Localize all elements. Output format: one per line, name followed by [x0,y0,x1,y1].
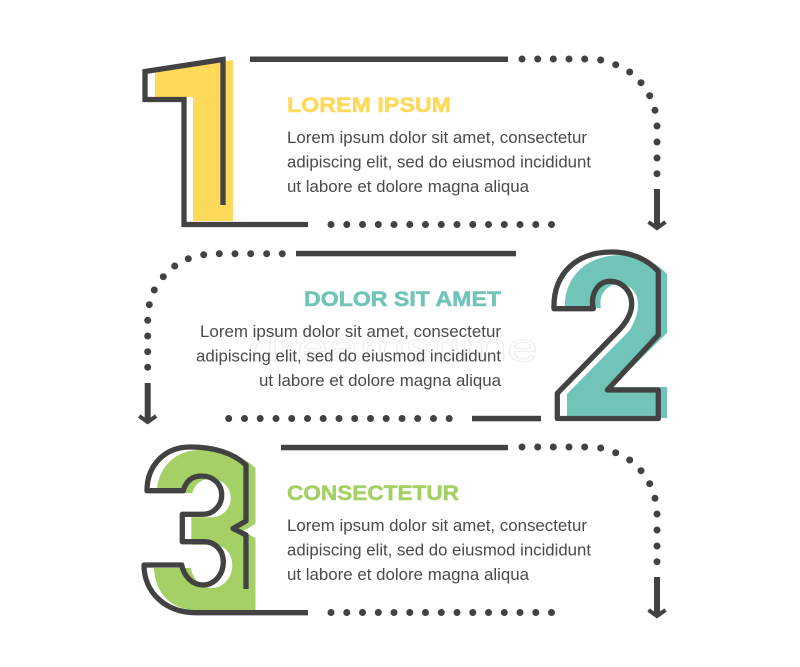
number 1 outline [145,60,308,224]
text block: step 2 [196,323,502,390]
heading: step 2: DOLOR SIT AMET [304,287,501,311]
number 2 outline [554,252,658,418]
number 2 fill [565,255,667,418]
text block: step 3 [287,517,591,584]
text block: step 1: Lorem ipsum dolor sit amet, consectetur [287,129,588,147]
text block: step 2: adipiscing elit, sed do eiusmod incididunt [196,348,501,366]
panel: step 1 [145,56,666,228]
connector: step 3 top line [281,445,508,450]
text block: step 2: ut labore et dolore magna aliqua [259,372,502,390]
text block: step 2: Lorem ipsum dolor sit amet, consectetur [200,323,502,341]
number 3 outline [144,447,308,613]
text block: step 1: ut labore et dolore magna aliqua [287,178,530,196]
connector: step 1 curved dots [518,56,660,177]
text block: step 1: adipiscing elit, sed do eiusmod incididunt [287,154,591,172]
connector: step 2 bottom dots [225,415,453,422]
text block: step 1 [287,129,591,196]
text block: step 3: adipiscing elit, sed do eiusmod incididunt [287,542,591,560]
connector: step 2 curved dots [144,250,286,371]
heading: step 3: CONSECTETUR [287,481,459,505]
number 3 fill [154,450,256,610]
text block: step 3: Lorem ipsum dolor sit amet, consectetur [287,517,588,535]
panel: step 3 [144,444,666,616]
panel: step 2 [139,250,667,422]
connector: step 3 curved dots [518,444,660,565]
heading: step 1: LOREM IPSUM [287,93,451,117]
arrow: step 3 exit [648,577,666,616]
connector: step 3 bottom dots [328,609,555,616]
connector: step 2 bottom line [472,416,541,421]
watermark: dreamstime [248,326,538,370]
arrow: step 1 to step 2 [648,189,666,228]
arrow: step 2 to step 3 [139,383,156,422]
number 1 fill [155,60,233,221]
connector: step 2 top line [296,251,516,256]
connector: step 1 top line [250,56,508,62]
text block: step 3: ut labore et dolore magna aliqua [287,566,530,584]
connector: step 1 bottom dots [328,221,555,228]
